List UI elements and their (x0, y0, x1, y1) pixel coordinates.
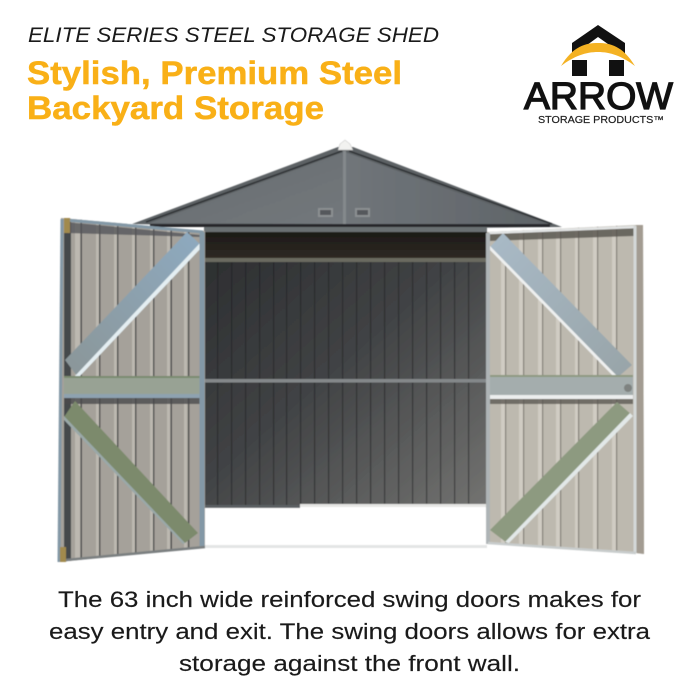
door ribs (501, 225, 617, 555)
shed interior (204, 227, 487, 548)
upper diagonal brace (65, 232, 201, 376)
description text: storage against the front wall. (179, 651, 520, 676)
door latch (624, 384, 632, 392)
right door (487, 225, 644, 555)
door hinges (60, 218, 70, 562)
heading: Stylish, Premium Steel (27, 55, 402, 91)
door frame (488, 226, 636, 553)
logo wordmark: ARROW (524, 76, 673, 118)
roof peak cap (338, 140, 353, 150)
icon: house roof mark (561, 25, 635, 76)
lower diagonal brace (490, 402, 632, 543)
upper diagonal brace (490, 233, 632, 377)
description text: The 63 inch wide reinforced swing doors makes for (58, 587, 641, 612)
heading: Backyard Storage (27, 90, 324, 126)
logo: Arrow Storage Products (524, 25, 673, 126)
cross bar (64, 376, 200, 398)
shed illustration (58, 140, 644, 563)
logo tagline: STORAGE PRODUCTS™ (538, 115, 664, 126)
description text (49, 587, 651, 676)
door frame (59, 219, 205, 562)
roof vents (318, 208, 370, 217)
description text: easy entry and exit. The swing doors allows for extra (49, 619, 651, 644)
lower diagonal brace (64, 401, 198, 543)
series label: ELITE SERIES STEEL STORAGE SHED (28, 24, 439, 47)
heading (27, 55, 402, 126)
shed roof (132, 140, 562, 229)
left door (58, 218, 205, 563)
door ribs (64, 218, 189, 563)
cross bar (490, 375, 633, 399)
